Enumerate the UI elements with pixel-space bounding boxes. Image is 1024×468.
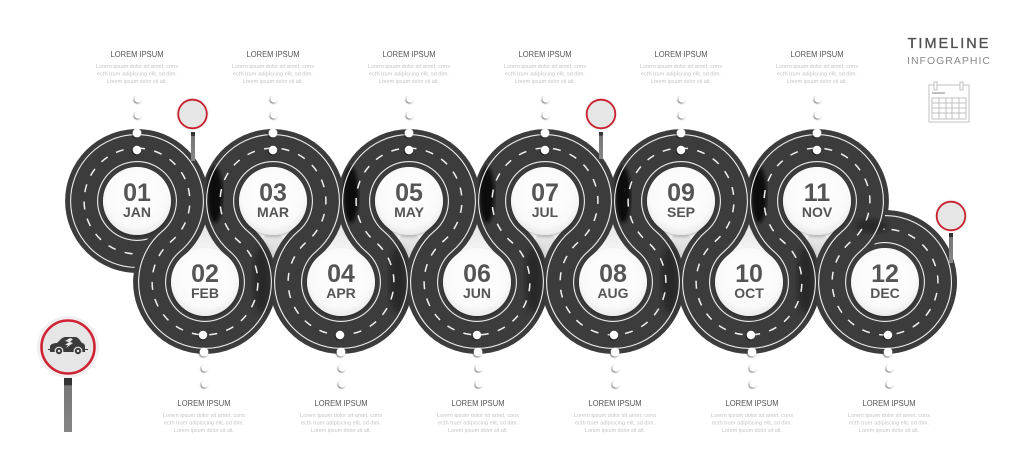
road sign 2 [584,98,618,159]
road: winding snake [137,148,938,335]
text block: top 6: Lorem ipsum dolor sit alt. [787,79,847,85]
month 03 march: MAR [257,204,289,220]
text block: top 4: LOREM IPSUM [518,49,572,59]
month 07 july: JUL [532,204,559,220]
text block: top 3: Lorem ipsum dolor sit alt. [379,79,439,85]
month 04 april: APR [326,285,356,301]
text block: bottom 3 [437,398,519,434]
text block: top 3: LOREM IPSUM [382,49,436,59]
text block: bottom 4: Lorem ipsum dolor sit amet, cons [574,413,656,419]
text block: top 6: ecth truer adipiscing elit, sd dim. [777,72,857,78]
text block: bottom 5: Lorem ipsum dolor sit amet, cons [711,413,793,419]
text block: top 5: ecth truer adipiscing elit, sd dim. [641,72,721,78]
text block: top 2: LOREM IPSUM [246,49,300,59]
text block: top 1: LOREM IPSUM [110,49,164,59]
car road sign [37,316,99,432]
text block: top 5: LOREM IPSUM [654,49,708,59]
month 10 october [715,248,783,316]
text block: bottom 5: Lorem ipsum dolor sit alt. [722,428,782,434]
text block: bottom 5: ecth truer adipiscing elit, sd dim. [712,420,792,426]
text block: top 4: ecth truer adipiscing elit, sd dim. [505,72,585,78]
text block: bottom 3: LOREM IPSUM [452,398,504,408]
text block: top 6: Lorem ipsum dolor sit amet, cons [776,64,858,70]
road: start circle january [71,135,203,267]
text block: bottom 1: Lorem ipsum dolor sit amet, cons [163,413,245,419]
text block: bottom 2: ecth truer adipiscing elit, sd dim. [301,420,381,426]
month 03 march [239,167,307,235]
month 03 march: 03 [259,179,287,207]
text block: top 3 [368,49,450,85]
month 12 december [851,248,919,316]
text block: bottom 3: ecth truer adipiscing elit, sd dim. [438,420,518,426]
text block: top 1: ecth truer adipiscing elit, sd dim. [97,72,177,78]
road shadows at overlaps [208,167,888,314]
month 01 january: JAN [123,204,151,220]
month 04 april [307,248,375,316]
road sign 1 [176,98,209,161]
road: edge line A [137,135,924,321]
month 11 november [783,167,851,235]
text block: top 3: Lorem ipsum dolor sit amet, cons [368,64,450,70]
month 05 may: MAY [394,204,425,220]
text block: bottom 3: Lorem ipsum dolor sit alt. [448,428,508,434]
text block: bottom 6: ecth truer adipiscing elit, sd dim. [849,420,929,426]
icon: electric car [48,337,88,355]
text block: top 4: Lorem ipsum dolor sit amet, cons [504,64,586,70]
text block: top 2: Lorem ipsum dolor sit amet, cons [232,64,314,70]
month 10 october: OCT [734,285,764,301]
month 09 september [647,167,715,235]
road: edge line B [137,162,951,348]
text block: bottom 4: Lorem ipsum dolor sit alt. [585,428,645,434]
text block: top 3: ecth truer adipiscing elit, sd dim. [369,72,449,78]
road: end circle december [819,216,951,348]
text block: bottom 4 [574,398,656,434]
text block: bottom 6 [848,398,930,434]
month 02 february: 02 [191,260,219,288]
text block: top 6: LOREM IPSUM [790,49,844,59]
text block: bottom 4: ecth truer adipiscing elit, sd dim. [575,420,655,426]
text block: top 4: Lorem ipsum dolor sit alt. [515,79,575,85]
text block: top 4 [504,49,586,85]
text block: bottom 6: Lorem ipsum dolor sit amet, cons [848,413,930,419]
month 10 october: 10 [735,260,763,288]
month 08 august: AUG [597,285,629,301]
text block: bottom 5: LOREM IPSUM [726,398,778,408]
text block: bottom 4: LOREM IPSUM [588,398,642,408]
month 01 january [103,167,171,235]
month 07 july [511,167,579,235]
text block: top 6 [776,49,858,85]
text block: bottom 6: Lorem ipsum dolor sit alt. [859,428,919,434]
month 06 june [443,248,511,316]
text block: top 2 [232,49,314,85]
text block: bottom 1: Lorem ipsum dolor sit alt. [174,428,234,434]
text block: bottom 2: Lorem ipsum dolor sit amet, cons [300,413,382,419]
road sign 3 [934,200,968,263]
text block: top 5: Lorem ipsum dolor sit amet, cons [640,64,722,70]
road: dashed centre line [137,148,938,335]
month 11 november: NOV [802,204,833,220]
text block: bottom 5 [711,398,793,434]
month 12 december: 12 [871,260,899,288]
text block: top 5 [640,49,722,85]
marker dots: top row [133,95,822,154]
month 05 may [375,167,443,235]
text block: top 1 [96,49,178,85]
text block: bottom 3: Lorem ipsum dolor sit amet, cons [437,413,519,419]
heading: timeline infographic: INFOGRAPHIC [907,55,991,67]
text block: bottom 2 [300,398,382,434]
month 11 november: 11 [804,179,830,207]
text block: bottom 2: LOREM IPSUM [314,398,368,408]
heading: timeline infographic [907,36,991,67]
text block: top 2: Lorem ipsum dolor sit alt. [243,79,303,85]
month 02 february [171,248,239,316]
month 09 september: 09 [667,179,695,207]
text block: bottom 6: LOREM IPSUM [862,398,916,408]
text block: bottom 2: Lorem ipsum dolor sit alt. [311,428,371,434]
month 06 june: 06 [463,260,491,288]
month 07 july: 07 [531,179,559,207]
text block: bottom 1 [163,398,245,434]
icon: calendar [929,82,969,122]
text block: bottom 1: LOREM IPSUM [178,398,230,408]
month 08 august [579,248,647,316]
month 09 september: SEP [667,204,695,220]
heading: timeline infographic: TIMELINE [908,36,990,52]
text block: top 1: Lorem ipsum dolor sit amet, cons [96,64,178,70]
text block: top 5: Lorem ipsum dolor sit alt. [651,79,711,85]
marker dots: bottom row [199,331,894,388]
text block: top 2: ecth truer adipiscing elit, sd dim. [233,72,313,78]
text block: top 1: Lorem ipsum dolor sit alt. [107,79,167,85]
text block: bottom 1: ecth truer adipiscing elit, sd dim. [164,420,244,426]
month 05 may: 05 [395,179,423,207]
background pockets between roads [180,205,845,262]
month 06 june: JUN [463,285,491,301]
month 01 january: 01 [123,179,151,207]
month 04 april: 04 [327,260,355,288]
month 08 august: 08 [599,260,627,288]
month 02 february: FEB [191,285,219,301]
month 12 december: DEC [870,285,900,301]
